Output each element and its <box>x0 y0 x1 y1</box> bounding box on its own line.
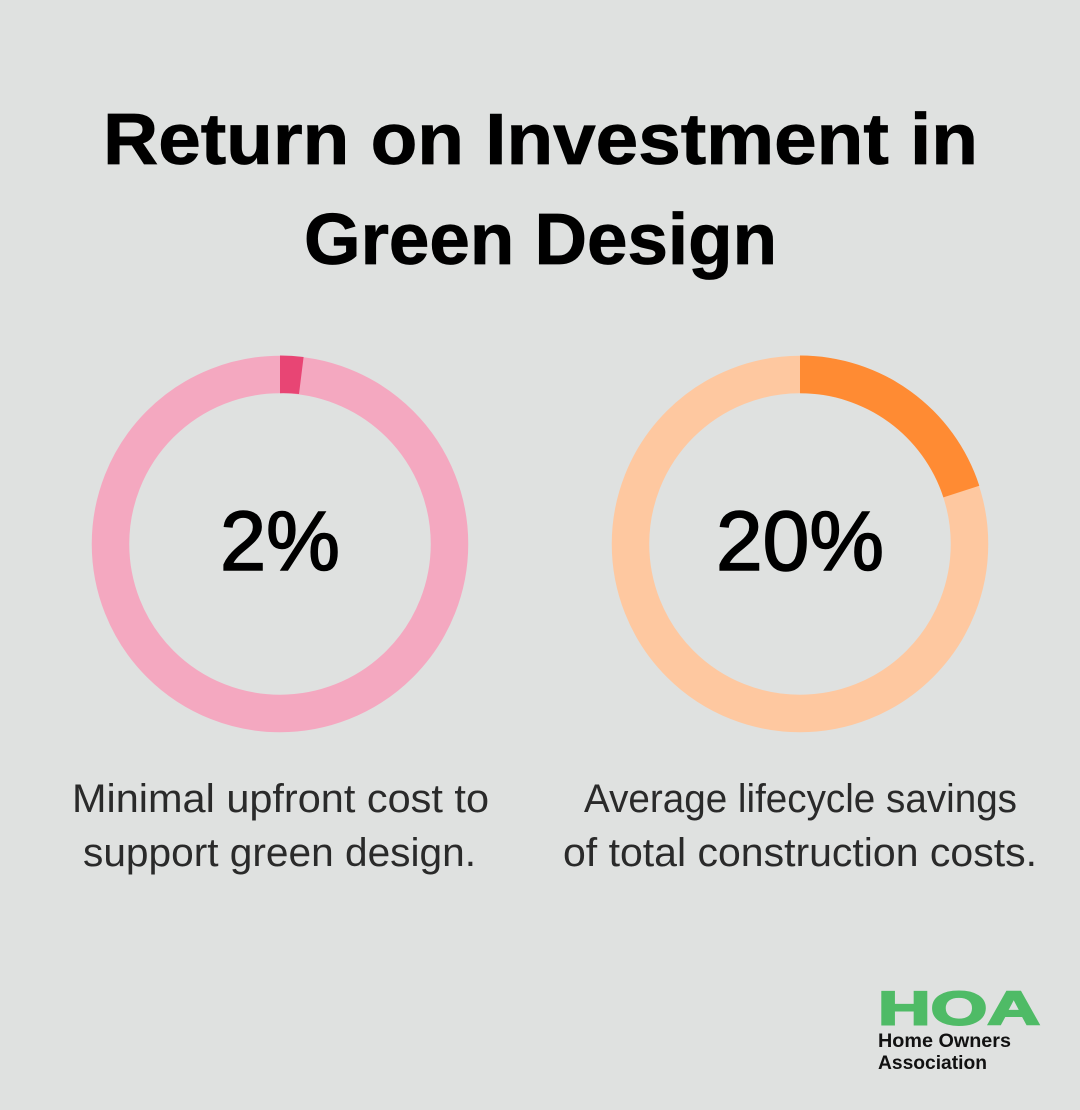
title <box>103 100 978 280</box>
logo text: Home Owners <box>878 1031 1011 1052</box>
caption: upfront cost <box>72 777 489 875</box>
caption: upfront cost: Minimal upfront cost to <box>72 777 489 821</box>
stat: 2%: 2% <box>220 494 340 588</box>
caption: lifecycle savings: Average lifecycle savings <box>584 777 1017 821</box>
panel: 20% donut <box>563 356 1037 875</box>
logo text: Association <box>878 1053 987 1074</box>
title: Green Design <box>304 200 777 280</box>
caption: upfront cost: support green design. <box>83 831 476 875</box>
donut segment: 2% <box>280 356 304 394</box>
logo mark: HOA: HOA <box>878 982 1040 1034</box>
logo text <box>878 1031 1011 1074</box>
donut track: pink <box>110 374 450 714</box>
stat: 20%: 20% <box>716 494 884 588</box>
title: Return on Investment in <box>103 100 978 180</box>
caption: lifecycle savings <box>563 777 1037 875</box>
donut segment: 20% <box>800 356 979 497</box>
caption: lifecycle savings: of total construction costs. <box>563 831 1037 875</box>
donut track: peach <box>630 374 970 714</box>
panel: 2% donut <box>72 356 489 875</box>
logo: Home Owners Association <box>878 982 1040 1074</box>
